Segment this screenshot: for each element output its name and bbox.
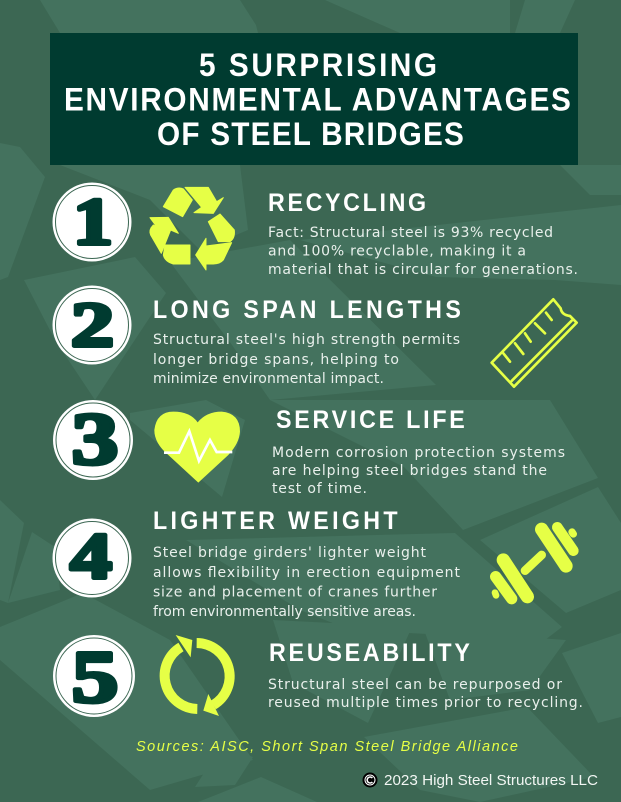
- title: OF STEEL BRIDGES: [157, 116, 464, 152]
- title: ENVIRONMENTAL ADVANTAGES: [64, 82, 571, 118]
- section: long span lengths: [153, 296, 461, 387]
- section: service life: test of time.: [272, 481, 367, 497]
- section: lighter weight: allows flexibility in erection equipment: [153, 565, 460, 581]
- title: 5 SURPRISING: [199, 47, 437, 83]
- section: recycling: and 100% recyclable, making it a: [268, 244, 526, 260]
- number badge 4: [52, 518, 132, 598]
- section: service life: are helping steel bridges stand the: [272, 463, 547, 479]
- section: long span lengths: LONG SPAN LENGTHS: [153, 296, 461, 324]
- section: long span lengths: minimize environmental impact.: [153, 371, 384, 387]
- section: long span lengths: Structural steel's high strength permits: [153, 332, 460, 348]
- section: service life: SERVICE LIFE: [276, 406, 465, 434]
- section: service life: Modern corrosion protection systems: [272, 445, 565, 461]
- section: recycling: [268, 189, 578, 278]
- icon: circular arrows: [165, 635, 230, 716]
- number badge 5: [53, 635, 135, 719]
- section: lighter weight: LIGHTER WEIGHT: [153, 507, 398, 535]
- icon: ruler: [492, 299, 577, 387]
- section: lighter weight: [153, 507, 460, 620]
- icon: recycling arrows: [150, 187, 234, 270]
- icon: dumbbell: [495, 527, 573, 599]
- section: reuseability: REUSEABILITY: [269, 639, 470, 667]
- section: reuseability: [268, 639, 583, 711]
- section: service life: [272, 406, 565, 497]
- section: lighter weight: size and placement of cranes further: [153, 584, 437, 600]
- section: recycling: RECYCLING: [268, 189, 426, 217]
- number badge 1: [52, 182, 132, 262]
- section: long span lengths: longer bridge spans, helping to: [153, 352, 399, 368]
- number badge 3: 3: [72, 399, 118, 481]
- icon: heart with pulse: [154, 412, 240, 483]
- number badge 2: 2: [71, 290, 114, 360]
- number badge 4: 4: [70, 520, 112, 593]
- number badge 1: 1: [73, 185, 113, 259]
- number badge 3: [53, 399, 133, 481]
- number badge 5: 5: [72, 637, 118, 719]
- number badge 2: [52, 286, 132, 364]
- copyright: 2023 High Steel Structures LLC: [384, 773, 598, 789]
- sources: Sources: AISC, Short Span Steel Bridge Alliance: [136, 739, 518, 755]
- title: [64, 47, 571, 152]
- section: reuseability: reused multiple times prior to recycling.: [268, 695, 583, 711]
- section: recycling: Fact: Structural steel is 93% recycled: [268, 225, 553, 241]
- title panel: [50, 33, 578, 165]
- section: lighter weight: from environmentally sensitive areas.: [153, 604, 416, 620]
- section: lighter weight: Steel bridge girders' lighter weight: [153, 545, 426, 561]
- section: recycling: material that is circular for generations.: [268, 262, 578, 278]
- section: reuseability: Structural steel can be repurposed or: [268, 677, 562, 693]
